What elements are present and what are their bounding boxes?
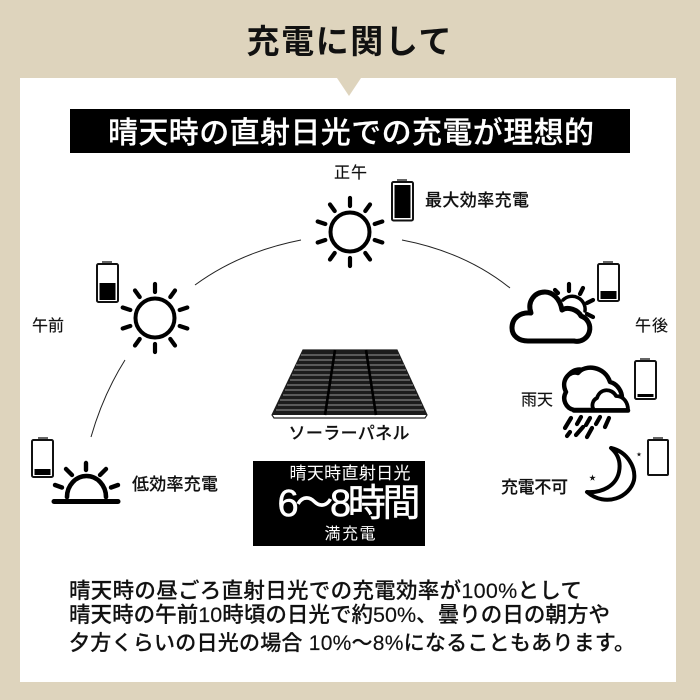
icon: empty battery: [648, 437, 668, 475]
label: cannot charge: 充電不可: [501, 473, 568, 498]
icon: morning battery: [97, 261, 118, 302]
icon: afternoon battery: [598, 261, 619, 301]
title: 充電に関して: [246, 15, 452, 63]
body text: 晴天時の午前10時頃の日光で約50%、曇りの日の朝方や: [69, 603, 610, 627]
icon: full battery: [392, 179, 413, 220]
icon: sunrise: [54, 463, 118, 502]
icon: rain battery: [635, 358, 656, 399]
callout: charge time: 晴天時直射日光: [290, 459, 410, 484]
icon: noon sun: [318, 198, 382, 266]
callout: charge time: [253, 459, 425, 546]
pointer notch: [337, 78, 361, 96]
label: low efficiency: 低効率充電: [132, 470, 218, 495]
arc: sun path: [91, 240, 510, 437]
icon: moon with stars: [587, 448, 642, 500]
label: max efficiency: 最大効率充電: [425, 186, 529, 211]
icon: sunrise battery: [32, 437, 53, 477]
body text: [69, 579, 635, 655]
label: morning: 午前: [32, 312, 64, 336]
callout: charge time: 6〜8時間: [278, 483, 420, 525]
label: afternoon: 午後: [635, 312, 668, 336]
body text: 晴天時の昼ごろ直射日光での充電効率が100%として: [69, 579, 582, 603]
icon: rain cloud: [564, 368, 628, 437]
icon: morning sun: [123, 284, 187, 352]
icon: moon with stars: ★: [636, 451, 642, 458]
label: noon: 正午: [334, 159, 367, 183]
heading banner: 晴天時の直射日光での充電が理想的: [108, 108, 594, 152]
label: solar panel: ソーラーパネル: [288, 419, 410, 444]
label: rainy: 雨天: [521, 386, 553, 410]
body text: 夕方くらいの日光の場合 10%〜8%になることもあります。: [69, 632, 635, 655]
icon: moon with stars: ★: [589, 473, 596, 483]
icon: cloud with sun: [512, 284, 593, 341]
icon: solar panel: [272, 350, 427, 418]
callout: charge time: 満充電: [324, 520, 376, 544]
